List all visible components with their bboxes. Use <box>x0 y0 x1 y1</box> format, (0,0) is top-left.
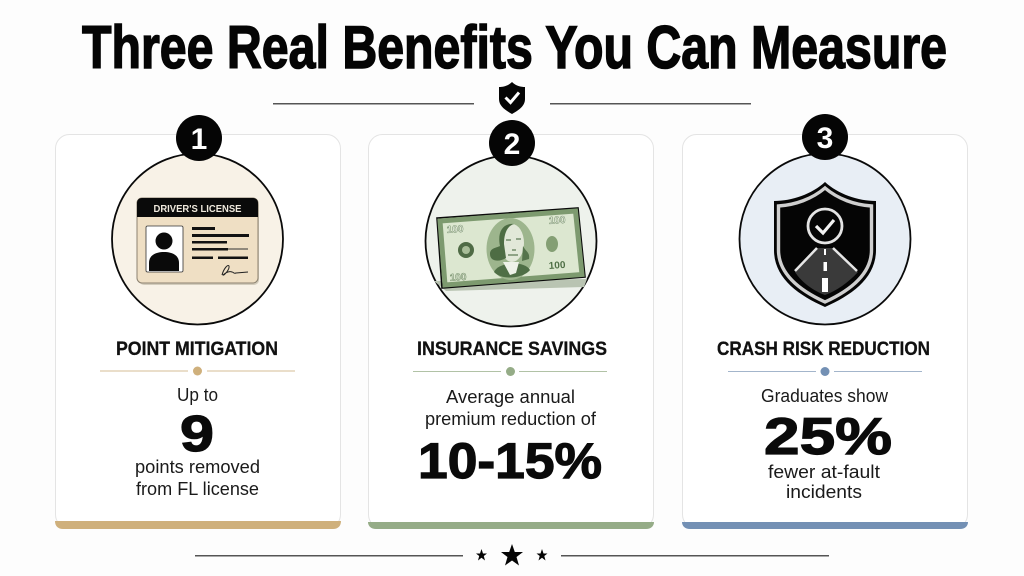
card accent bar <box>682 522 968 529</box>
icon: shield check <box>499 82 525 114</box>
panel: point mitigation <box>55 115 341 529</box>
icon circle: hundred dollar bill: 100 <box>548 215 566 227</box>
text: premium reduction of: premium reduction of <box>425 408 597 429</box>
portrait <box>486 218 534 280</box>
number badge 2 <box>489 120 535 166</box>
number badge 3: 3 <box>817 122 833 155</box>
number badge 2: 2 <box>504 128 520 161</box>
text: graduates show: Graduates show <box>761 385 889 406</box>
icon circle: hundred dollar bill: 100 <box>548 260 566 272</box>
divider <box>728 367 922 376</box>
stat: 10-15%: 10-15% <box>418 433 602 489</box>
number badge 1 <box>176 115 222 161</box>
panel: crash risk reduction <box>682 114 968 529</box>
text: points removed: points removed <box>135 456 260 477</box>
card accent bar <box>368 522 654 529</box>
icon circle: hundred dollar bill: 100 <box>449 272 467 284</box>
text: average annual: Average annual <box>446 386 575 407</box>
divider <box>100 366 295 376</box>
icon circle: hundred dollar bill <box>426 156 596 326</box>
footer divider with stars <box>195 544 829 566</box>
icon circle: driver's license <box>112 154 283 324</box>
icon: stars <box>476 544 548 566</box>
header divider with shield <box>273 82 751 114</box>
stat: 9: 9 <box>180 405 214 462</box>
text: from FL license: from FL license <box>136 478 259 499</box>
card accent bar <box>55 521 341 529</box>
number badge 1: 1 <box>191 123 207 156</box>
stat: 25%: 25% <box>764 408 892 466</box>
text: fewer at-fault: fewer at-fault <box>768 461 880 482</box>
divider <box>413 367 607 376</box>
panel: insurance savings <box>368 120 654 529</box>
heading: CRASH RISK REDUCTION <box>717 338 930 360</box>
number badge 3 <box>802 114 848 160</box>
text: incidents: incidents <box>786 481 862 502</box>
heading: POINT MITIGATION <box>116 338 278 360</box>
heading: INSURANCE SAVINGS <box>417 338 607 360</box>
icon circle: driver's license: DRIVER'S LICENSE <box>154 204 242 215</box>
icon circle: hundred dollar bill: 100 <box>446 224 464 236</box>
text: up to: Up to <box>177 384 218 405</box>
icon circle: shield with road <box>740 154 910 324</box>
